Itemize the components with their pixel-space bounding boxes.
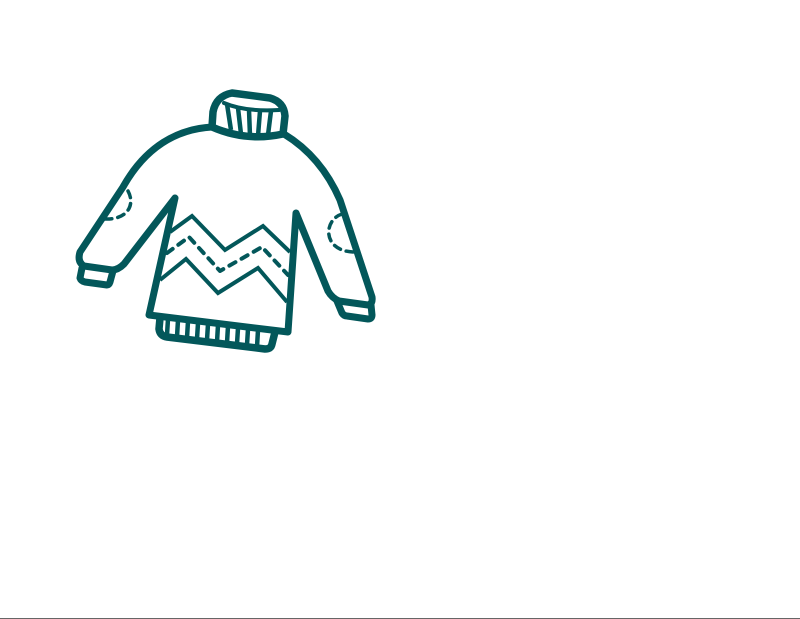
left cuff (80, 268, 113, 285)
collar (212, 93, 285, 137)
right cuff (337, 301, 372, 319)
right elbow patch (329, 214, 355, 252)
sweater body outline (79, 127, 372, 332)
zigzag pattern bottom (160, 259, 287, 302)
bottom border line (0, 618, 800, 619)
icon: sweater (79, 93, 372, 349)
zigzag pattern dashed (167, 237, 288, 275)
zigzag pattern top (170, 216, 290, 252)
left elbow patch (105, 191, 131, 219)
hem ribbing (159, 318, 275, 349)
